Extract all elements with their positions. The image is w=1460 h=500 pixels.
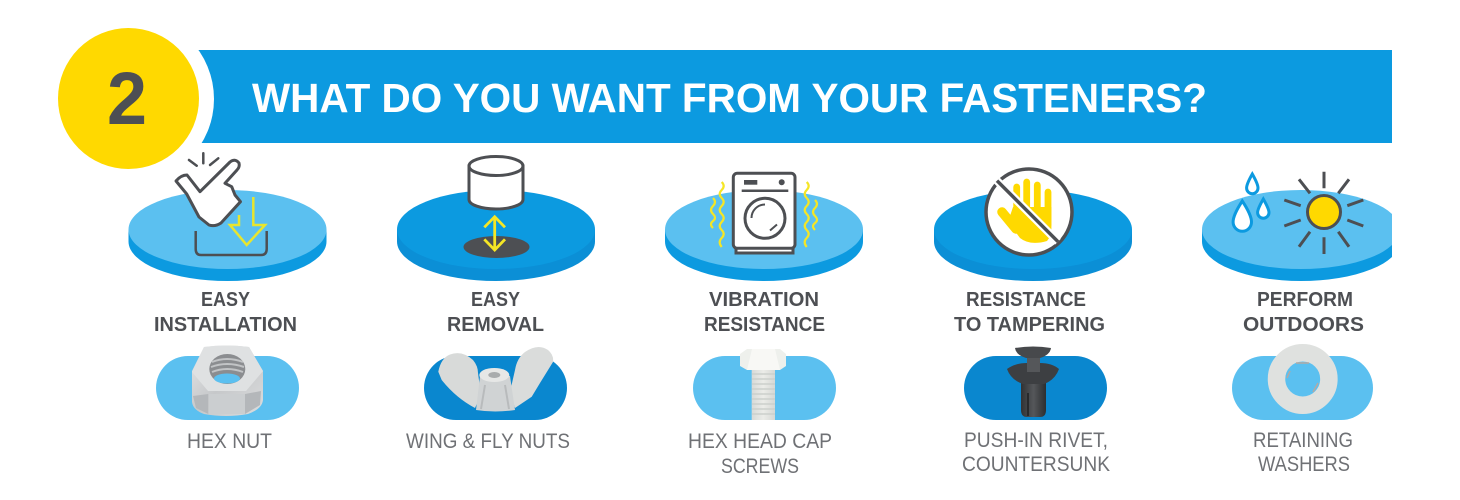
icon: cylinder: [469, 156, 523, 209]
banner: [190, 50, 1392, 143]
label: INSTALLATION: [154, 314, 297, 336]
pill with hex nut: [156, 346, 299, 420]
label: [954, 289, 1105, 336]
caption: PUSH-IN RIVET,: [964, 429, 1108, 452]
icon: hole: [464, 236, 530, 258]
pill with push-in rivet: [964, 346, 1107, 420]
disc: [665, 190, 863, 281]
label: [1243, 289, 1364, 336]
label: OUTDOORS: [1243, 314, 1364, 336]
icon: washing machine: [733, 173, 795, 253]
caption: [688, 430, 832, 478]
label: TO TAMPERING: [954, 314, 1105, 336]
label: [154, 289, 297, 336]
icon: tapping hand: [176, 153, 240, 226]
caption: HEX NUT: [187, 430, 272, 453]
pill with wing nut: [424, 347, 567, 420]
label: RESISTANCE: [966, 289, 1086, 311]
caption: [962, 429, 1110, 476]
label: EASY: [201, 289, 251, 311]
label: VIBRATION: [709, 289, 819, 311]
caption: COUNTERSUNK: [962, 453, 1110, 476]
disc: [397, 190, 595, 281]
panel: resistance to tampering: [934, 169, 1132, 476]
label: [447, 289, 544, 336]
label: [704, 289, 825, 336]
panel: vibration resistance: [665, 173, 863, 478]
caption: WING & FLY NUTS: [406, 430, 570, 453]
panel: easy removal: [397, 156, 595, 453]
icon: double arrow: [484, 217, 505, 250]
label: PERFORM: [1257, 289, 1353, 311]
icon: vibration lines: [711, 182, 817, 247]
circle badge with number 2: 2: [107, 57, 147, 140]
caption: WASHERS: [1258, 453, 1350, 476]
caption: [1253, 429, 1353, 476]
disc: [128, 190, 326, 281]
pill with hex head screw: [693, 349, 836, 420]
icon: tray with down arrow: [196, 197, 267, 255]
panel: perform outdoors: [1202, 172, 1400, 476]
disc: [934, 190, 1132, 281]
circle badge with number 2: [44, 14, 214, 184]
caption: HEX HEAD CAP: [688, 430, 832, 453]
label: EASY: [471, 289, 521, 311]
label: REMOVAL: [447, 314, 544, 336]
icon: water drops: [1233, 174, 1269, 231]
pill with washer: [1232, 353, 1373, 420]
icon: no-touch sign: [986, 169, 1072, 255]
label: RESISTANCE: [704, 314, 825, 336]
icon: sun: [1284, 172, 1363, 254]
disc: [1202, 190, 1400, 281]
caption: SCREWS: [721, 455, 799, 478]
title: WHAT DO YOU WANT FROM YOUR FASTENERS?: [252, 75, 1207, 121]
panel: easy installation: [128, 153, 326, 453]
caption: RETAINING: [1253, 429, 1353, 452]
